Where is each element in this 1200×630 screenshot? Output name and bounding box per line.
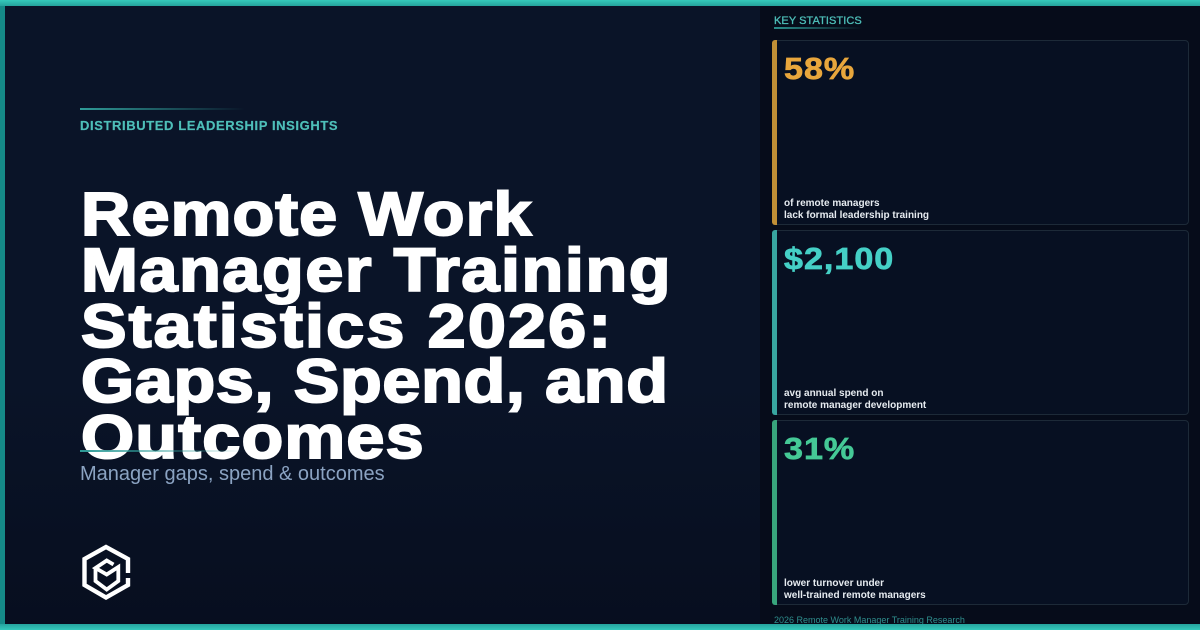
eyebrow rule: [80, 108, 245, 110]
title: Manager Training: [81, 236, 672, 304]
stat label: well-trained remote managers: [784, 590, 926, 601]
subtitle: Manager gaps, spend & outcomes: [80, 463, 385, 485]
right sidebar background: [760, 0, 1200, 630]
card background: [772, 230, 1189, 415]
stat label: remote manager development: [784, 400, 926, 411]
icon: hexagon cube logo: [82, 544, 130, 600]
card background: [772, 40, 1189, 225]
card background: [772, 420, 1189, 605]
stat label: [784, 388, 926, 411]
panel: stat 58%: [772, 40, 1189, 225]
accent bar: [772, 40, 777, 225]
panel: stat 31%: [772, 420, 1189, 605]
stat number: 58%: [784, 51, 855, 86]
title: Remote Work: [81, 180, 532, 248]
subtitle rule: [80, 450, 245, 452]
title: Gaps, Spend, and: [81, 347, 669, 415]
bottom frame bar: [0, 624, 1200, 630]
stat label: lower turnover under: [784, 578, 884, 589]
title: [81, 180, 672, 471]
stat label: avg annual spend on: [784, 388, 883, 399]
eyebrow: DISTRIBUTED LEADERSHIP INSIGHTS: [80, 118, 338, 133]
top frame bar: [0, 0, 1200, 6]
section heading: key statistics: KEY STATISTICS: [774, 15, 862, 27]
stat label: [784, 198, 929, 221]
stat label: lack formal leadership training: [784, 210, 929, 221]
title: Outcomes: [81, 403, 425, 471]
stat label: [784, 578, 926, 601]
heading underline: [774, 27, 862, 29]
source footnote: 2026 Remote Work Manager Training Research: [774, 615, 965, 625]
left frame bar: [0, 6, 5, 624]
accent bar: [772, 230, 777, 415]
stat label: of remote managers: [784, 198, 880, 209]
accent bar: [772, 420, 777, 605]
panel: stat $2,100: [772, 230, 1189, 415]
stat number: $2,100: [784, 241, 894, 276]
title: Statistics 2026:: [81, 292, 613, 360]
stat number: 31%: [784, 431, 855, 466]
